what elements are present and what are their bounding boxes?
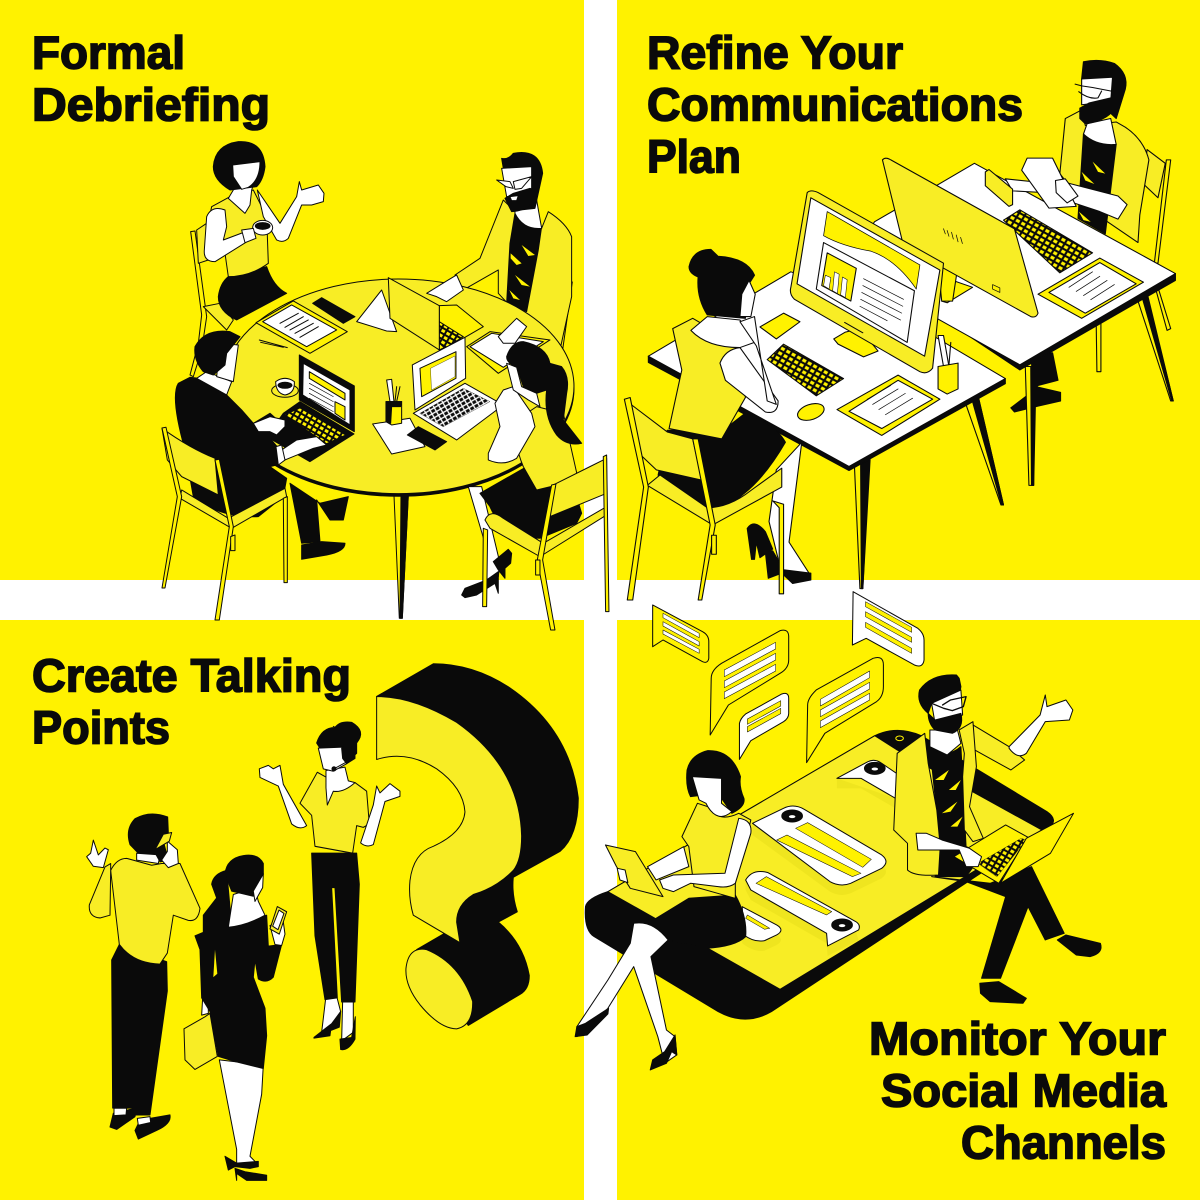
back desk items: [882, 158, 1143, 318]
heading: Refine Your Communications Plan: Plan: [647, 130, 741, 182]
heading: Monitor Your Social Media Channels: Monitor Your: [869, 1012, 1166, 1064]
front desk items: [760, 313, 958, 435]
floating speech bubbles: [653, 592, 924, 763]
person: man with laptop: [894, 675, 1101, 1003]
person: woman with phone and bag: [184, 855, 287, 1180]
question mark: [377, 664, 578, 1029]
person: man in black sweater: [162, 331, 348, 620]
front monitor: [790, 191, 944, 373]
illustration: bottom left, talking points: [87, 664, 578, 1180]
on-screen chat bubbles: [742, 760, 899, 956]
heading: Monitor Your Social Media Channels: [869, 1012, 1166, 1168]
person: woman with headset: [259, 722, 400, 1050]
person hands with phone and papers: [985, 158, 1127, 219]
round table: [223, 279, 574, 618]
heading: Formal Debriefing: Debriefing: [32, 78, 270, 130]
person: man on phone: [87, 814, 200, 1139]
smartphone body: [585, 730, 1053, 1019]
front desk: [648, 272, 1005, 589]
person: bearded man, chair and leg: [1011, 60, 1171, 412]
panel background: bottom left: [0, 620, 584, 1200]
panel background: bottom right: [617, 620, 1200, 1200]
person: woman with tablet: [575, 751, 751, 1070]
heading: Refine Your Communications Plan: Refine Your: [647, 26, 903, 78]
heading: Create Talking Points: Create Talking: [32, 650, 351, 702]
illustration: bottom right, social media: [575, 592, 1101, 1070]
heading: Refine Your Communications Plan: Communications: [647, 78, 1023, 130]
heading: Refine Your Communications Plan: [647, 26, 1023, 182]
person: bearded man in blazer: [455, 152, 572, 350]
heading: Create Talking Points: Points: [32, 702, 170, 754]
person: woman with ponytail and chair: [462, 342, 609, 630]
heading: Formal Debriefing: Formal: [32, 26, 185, 78]
person: woman with hair bun: [624, 249, 811, 600]
table items: [256, 275, 550, 462]
heading: Monitor Your Social Media Channels: Social Media: [881, 1064, 1166, 1116]
heading: Create Talking Points: [32, 650, 351, 754]
illustration: top left, round-table debrief: [162, 142, 609, 630]
panel background: top right: [617, 0, 1200, 580]
heading: Monitor Your Social Media Channels: Channels: [961, 1116, 1166, 1168]
panel background: top left: [0, 0, 584, 580]
heading: Formal Debriefing: [32, 26, 270, 130]
illustration: top right, desks and monitors: [624, 60, 1175, 600]
camera: [896, 736, 903, 741]
back desk: [845, 163, 1175, 485]
person: woman with coffee and chair: [190, 142, 324, 377]
smartphone screen: [608, 736, 1042, 989]
